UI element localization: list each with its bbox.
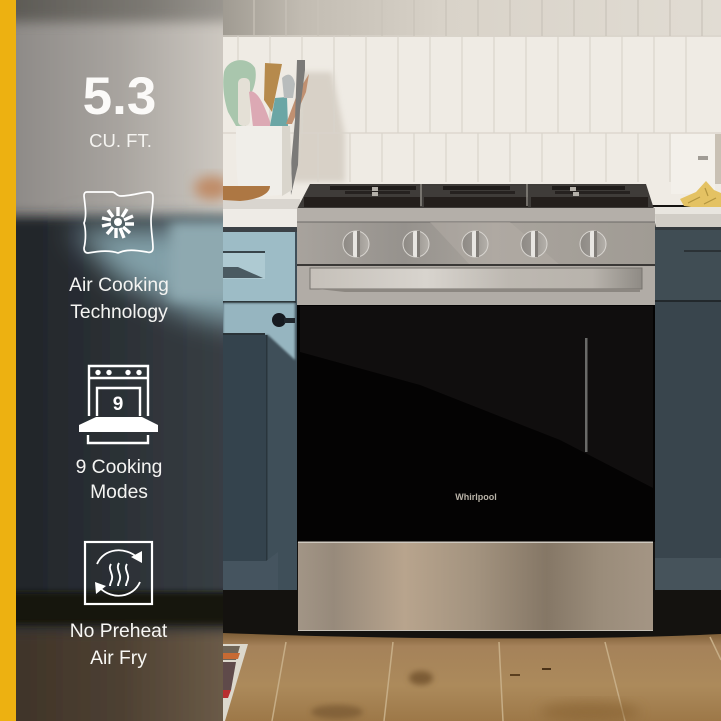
utensils [223,60,256,126]
background: kitchen scene [223,0,721,721]
wood board [223,186,270,201]
feature: air cooking technology: Technology [70,302,168,323]
oven knobs [343,231,606,257]
crock body [236,126,292,196]
capacity value: 5.3 [83,67,156,126]
cabinets left [223,232,297,592]
feature: no preheat air fry: Air Fry [90,648,147,669]
label: No Preheat [70,621,168,642]
countertops [223,209,297,227]
feature: air cooking technology [69,192,169,323]
label: Air Cooking [69,275,169,296]
icon: no preheat [85,542,152,604]
feature: 9 cooking modes: Modes [90,482,148,503]
cooktop grates [297,184,654,209]
rug [223,644,248,721]
yellow towel [680,181,721,208]
label: 9 Cooking [76,457,162,478]
storage drawer [298,542,653,631]
control panel [297,208,655,222]
oven door top [297,266,655,305]
cabinet knob [272,313,286,327]
cabinets right [655,230,721,592]
range [297,184,655,631]
tile wall [223,0,721,205]
icon: oven: 9 [113,394,123,415]
blurred left panel [16,0,223,721]
capacity unit: CU. FT. [89,130,152,151]
oven window [297,305,655,542]
yellow accent bar [0,0,16,721]
wood floor [223,633,721,721]
feature: capacity [83,67,156,151]
feature: 9 cooking modes [76,366,162,503]
oven handle [310,268,642,289]
brand logo: Whirlpool [455,492,497,502]
utensil crock [223,60,309,201]
feature: no preheat air fry [70,542,168,669]
outlet [671,134,715,194]
toe kick [223,590,721,592]
icon: air cooking [84,192,153,253]
